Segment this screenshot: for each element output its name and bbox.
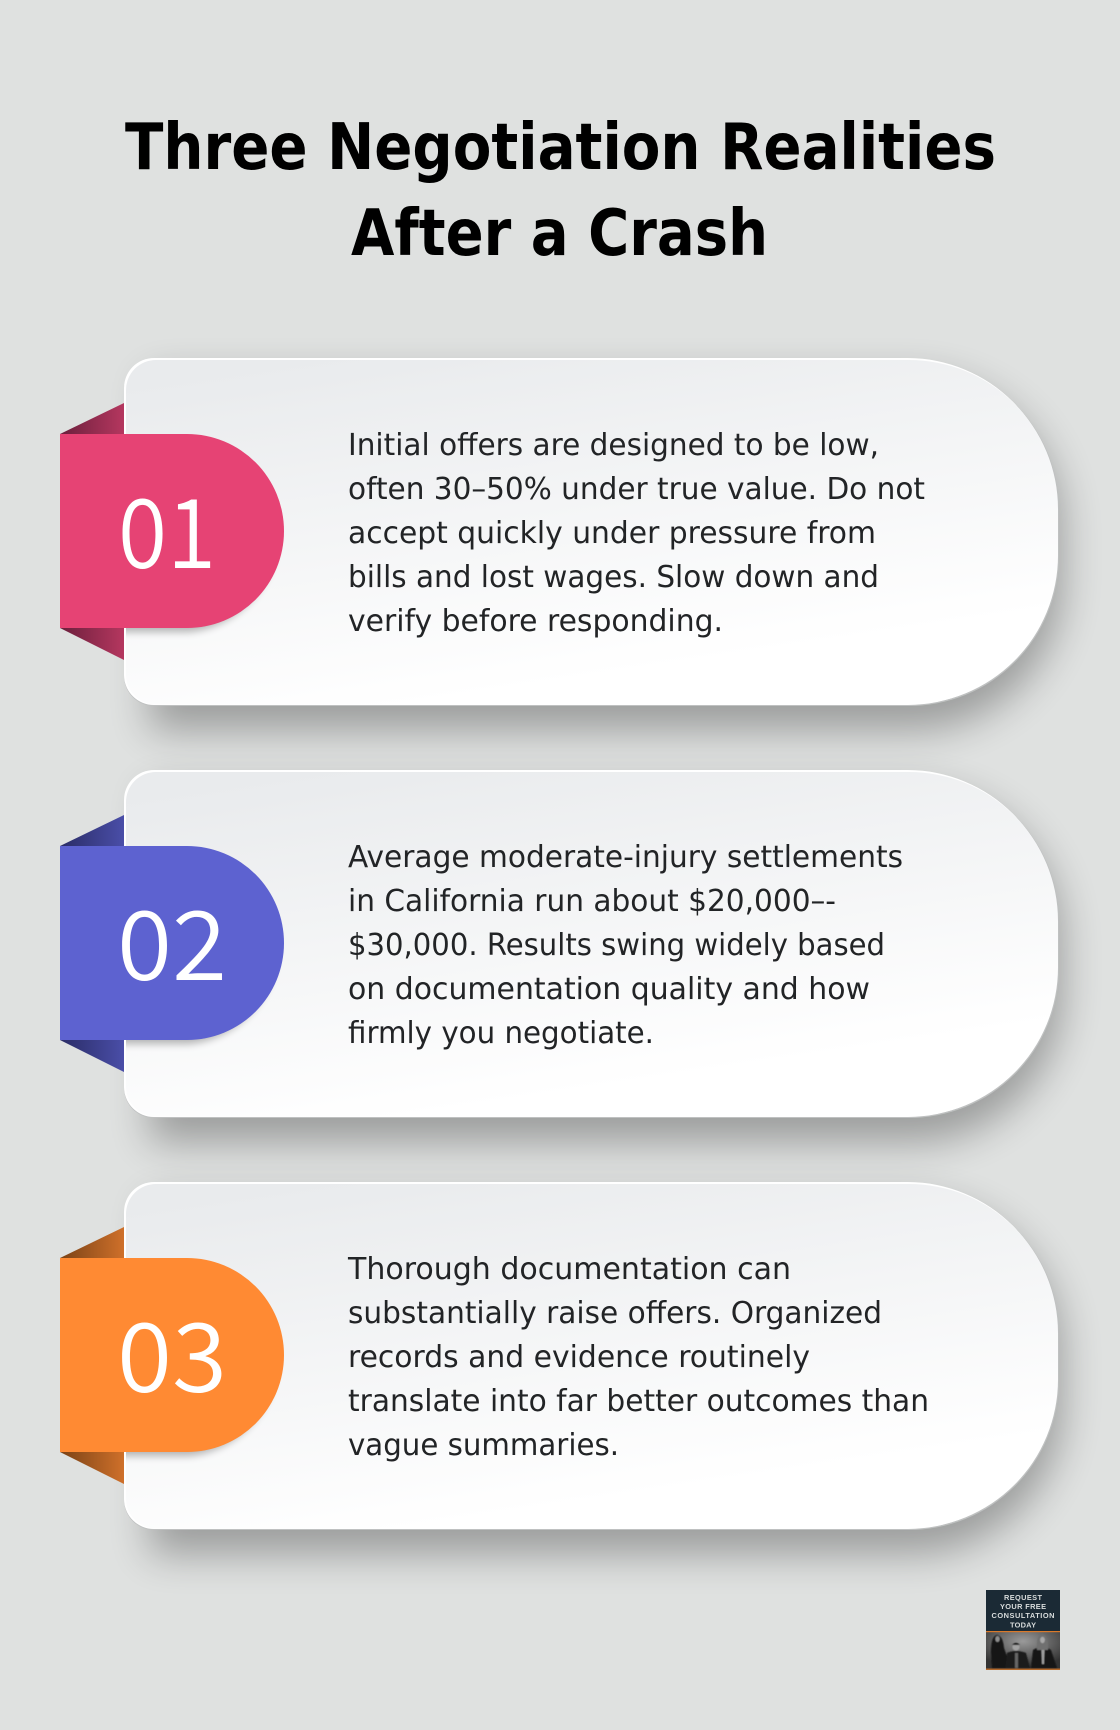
text block 01: bills and lost wages. Slow down and <box>348 560 879 595</box>
ribbon fold bottom <box>60 1040 124 1072</box>
text block 01: accept quickly under pressure from <box>348 516 876 551</box>
text block 02: firmly you negotiate. <box>348 1016 654 1051</box>
text block 01 <box>348 428 925 639</box>
title <box>125 111 996 271</box>
badge 02: 02 <box>117 869 227 1008</box>
badge 02 <box>60 846 284 1040</box>
badge 01: 01 <box>118 457 216 596</box>
logo: request your free consultation today: TODAY <box>1010 1620 1036 1630</box>
text block 03: vague summaries. <box>348 1428 619 1463</box>
ribbon fold bottom <box>60 1452 124 1484</box>
logo: request your free consultation today: CONSULTATION <box>992 1611 1054 1620</box>
card 01 <box>124 358 1059 706</box>
text block 02: Average moderate-injury settlements <box>348 840 903 875</box>
logo: request your free consultation today <box>986 1590 1060 1670</box>
text block 03: substantially raise offers. Organized <box>348 1296 882 1331</box>
panel: reality 02 <box>60 770 1062 1142</box>
card 02 <box>124 770 1059 1118</box>
title: Three Negotiation Realities <box>125 111 996 185</box>
text block 03 <box>347 1252 929 1463</box>
text block 02: $30,000. Results swing widely based <box>348 928 885 963</box>
text block 01: often 30–50% under true value. Do not <box>348 472 925 507</box>
ribbon fold top <box>60 815 124 846</box>
text block 01: Initial offers are designed to be low, <box>348 428 879 463</box>
text block 02 <box>348 840 903 1051</box>
panel: reality 03 <box>60 1182 1062 1554</box>
text block 03: Thorough documentation can <box>347 1252 791 1287</box>
card 03 <box>124 1182 1059 1530</box>
panel: reality 01 <box>60 358 1062 730</box>
text block 02: in California run about $20,000–- <box>348 884 836 919</box>
badge 03 <box>60 1258 284 1452</box>
text block 03: records and evidence routinely <box>348 1340 810 1375</box>
ribbon fold top <box>60 1227 124 1258</box>
logo: request your free consultation today: REQUEST <box>1004 1593 1042 1602</box>
ribbon fold bottom <box>60 628 124 660</box>
ribbon fold top <box>60 403 124 434</box>
logo: request your free consultation today: YOUR FREE <box>1000 1602 1046 1611</box>
text block 01: verify before responding. <box>348 604 723 639</box>
badge 01 <box>60 434 284 628</box>
title: After a Crash <box>351 197 768 271</box>
text block 02: on documentation quality and how <box>348 972 870 1007</box>
text block 03: translate into far better outcomes than <box>348 1384 929 1419</box>
badge 03: 03 <box>117 1281 227 1420</box>
